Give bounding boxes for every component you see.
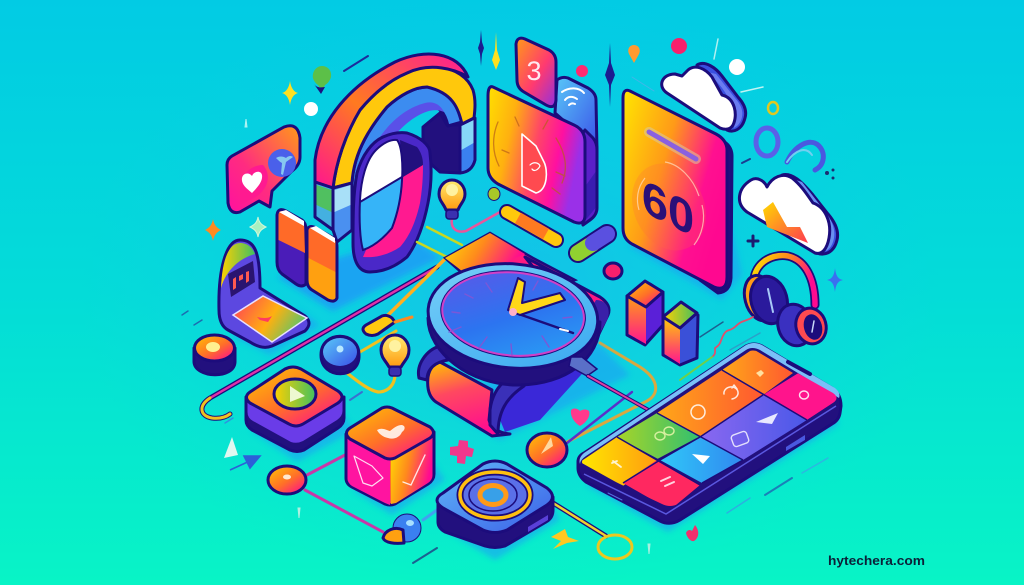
icon: light bulb lower <box>381 335 409 376</box>
back panel <box>555 77 597 150</box>
side button <box>786 435 805 451</box>
number: 60 <box>642 169 694 247</box>
rear strap <box>525 257 609 340</box>
small card <box>516 38 556 107</box>
shadow base <box>277 235 440 311</box>
sparkles top middle <box>478 30 763 200</box>
slot <box>649 132 696 159</box>
arch right foot <box>460 118 475 173</box>
rainbow arch device with ring <box>277 54 475 311</box>
lit frame edge <box>580 343 840 464</box>
wires and small lines <box>225 212 656 536</box>
icon: chat bubble with heart <box>227 126 300 213</box>
cube icon <box>346 407 445 515</box>
long line with hook <box>202 267 437 418</box>
smartphone <box>578 343 842 532</box>
left feet <box>315 182 333 230</box>
bars beside arch <box>277 210 337 301</box>
arch blue band <box>352 87 462 215</box>
shadow <box>627 220 742 300</box>
rear platform <box>445 233 575 300</box>
scattered decorations top-left <box>182 56 368 325</box>
arch outer band <box>315 54 468 188</box>
side edge <box>700 136 732 293</box>
connector <box>569 357 597 376</box>
body <box>578 344 841 523</box>
second hand <box>513 312 573 333</box>
front <box>488 87 585 223</box>
icon: pill connector small <box>363 315 412 336</box>
bezel <box>424 257 602 375</box>
play box <box>246 367 355 462</box>
shadow <box>585 405 838 532</box>
headphones <box>680 256 843 380</box>
tablet with sixty <box>618 90 742 300</box>
icon: chair-shaped device <box>219 240 320 355</box>
target square device <box>437 461 560 560</box>
icon: red ball connector <box>268 466 306 494</box>
cloud lower <box>739 174 838 254</box>
wallet with card: 3 <box>526 56 542 86</box>
right edge <box>570 130 597 225</box>
ring <box>353 133 431 272</box>
bar chart blocks <box>627 281 760 365</box>
icon: small blue and orange ball <box>383 514 421 543</box>
lugs <box>418 346 448 380</box>
speaker slot <box>788 362 810 374</box>
icon: ring pull <box>598 535 632 559</box>
icon: blue ball <box>321 336 359 374</box>
shadow <box>432 345 630 440</box>
wallet with card <box>488 38 597 225</box>
screen glyphs <box>612 461 621 467</box>
bar two <box>663 304 698 365</box>
face <box>623 90 727 288</box>
watermark text: hytechera.com <box>828 553 925 568</box>
ticks <box>449 281 572 355</box>
bar one <box>627 284 663 345</box>
watch <box>418 233 652 440</box>
icon: round button <box>194 335 235 375</box>
yellow hands <box>508 278 565 315</box>
pills <box>507 212 622 279</box>
lower strap <box>428 362 510 436</box>
arch back dark side <box>423 113 460 173</box>
arch yellow band <box>333 66 475 188</box>
cloud top <box>662 63 746 131</box>
lower band shadow <box>490 365 590 432</box>
dial circle <box>618 151 720 263</box>
screen tiles <box>580 349 842 510</box>
small decorations bottom <box>224 408 828 563</box>
icon: light bulb top <box>439 180 465 219</box>
decorative rings and arc <box>742 102 834 180</box>
body depth <box>428 318 600 385</box>
